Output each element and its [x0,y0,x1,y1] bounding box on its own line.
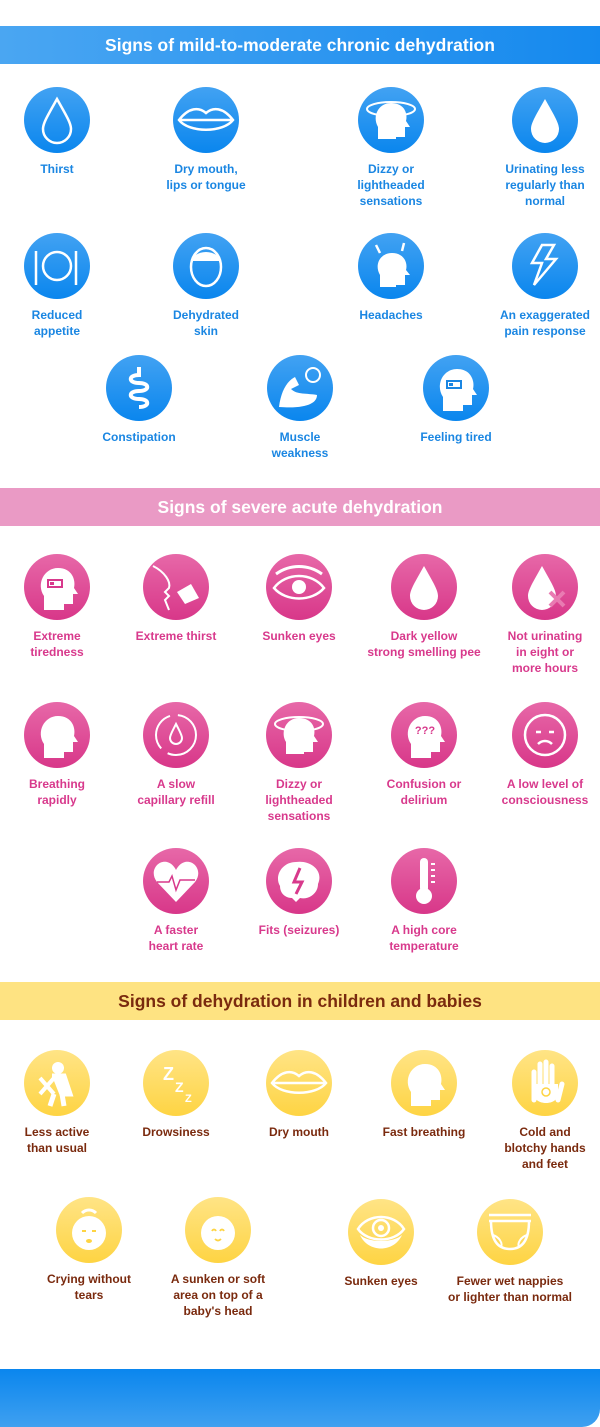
item: Slow capillary refill: A slow [157,777,195,791]
item: Dry mouth [266,1050,332,1139]
item: Confusion: Confusion or [387,777,461,791]
item: Urinating less [505,87,585,208]
item: Extreme thirst [136,554,216,643]
item: Fits: Fits (seizures) [259,923,339,937]
item: Fast breathing [383,1050,465,1139]
item: Faster heart rate: A faster [154,923,198,937]
item: High core temperature: A high core [391,923,457,937]
heading: mild-to-moderate [0,26,600,64]
item: Sunken soft area: area on top of a [173,1288,263,1302]
item: High core temperature: temperature [389,939,459,953]
item: Cold hands: blotchy hands [504,1141,586,1155]
item: Muscle weakness: Muscle [280,430,320,444]
item: Crying without tears: tears [75,1288,103,1302]
item: Sunken soft area [171,1197,265,1318]
item: Sunken eyes [344,1199,418,1288]
item: Feeling tired [420,355,492,444]
item: Reduced appetite [24,233,90,338]
item: Dehydrated skin: skin [194,324,218,338]
item: Crying without tears: Crying without [47,1272,131,1286]
item: Dark yellow pee: strong smelling pee [367,645,481,659]
item: Cold hands [504,1050,586,1171]
item: Confusion: ??? [415,725,435,737]
item: Dry mouth: Dry mouth, [174,162,238,176]
item: Dizzy: sensations [360,194,422,208]
item: Dry mouth: lips or tongue [166,178,246,192]
item: Dehydrated skin [173,233,239,338]
heading: severe acute [0,488,600,526]
item: Fewer wet nappies [448,1199,572,1304]
item: Dizzy severe: sensations [268,809,330,823]
item: Drowsiness: Drowsiness [142,1125,210,1139]
item: Dizzy: lightheaded [357,178,425,192]
item: Less active: than usual [27,1141,87,1155]
item: Constipation: Constipation [102,430,176,444]
item: Low consciousness: consciousness [502,793,588,807]
item: Dry mouth: Dry mouth [269,1125,329,1139]
item: Not urinating: in eight or [516,645,574,659]
item: Cold hands: Cold and [519,1125,571,1139]
item: Drowsiness [142,1050,210,1139]
item: Slow capillary refill: capillary refill [137,793,215,807]
item: Extreme tiredness: Extreme [33,629,81,643]
item: Extreme tiredness [24,554,90,659]
item: Not urinating: Not urinating [508,629,582,643]
item: Low consciousness [502,702,588,807]
item: Less active: Less active [25,1125,89,1139]
item: Faster heart rate: heart rate [149,939,203,953]
item: Low consciousness: A low level of [507,777,583,791]
item: Breathing rapidly: rapidly [37,793,77,807]
item: Fast breathing: Fast breathing [383,1125,465,1139]
heading: children and babies [0,982,600,1020]
item: Sunken eyes [262,554,336,643]
item: Slow capillary refill [137,702,215,807]
item: Breathing rapidly: Breathing [29,777,85,791]
item: Cold hands: and feet [522,1157,568,1171]
item: Not urinating [508,554,582,675]
item: Dark yellow pee [367,554,481,659]
item: Feeling tired: Feeling tired [420,430,492,444]
item: Dry mouth [166,87,246,192]
item: Crying without tears [47,1197,131,1302]
item: Sunken soft area: A sunken or soft [171,1272,265,1286]
item: Pain response: An exaggerated [500,308,590,322]
item: Dizzy severe: lightheaded [265,793,333,807]
item: Constipation [102,355,176,444]
item: Thirst: Thirst [40,162,74,176]
item: Urinating less: Urinating less [505,162,585,176]
item: Dizzy [357,87,425,208]
heading: severe acute: Signs of severe acute dehydration [158,497,442,517]
item: High core temperature [389,848,459,953]
footer band [0,1369,600,1427]
item: Drowsiness: Z [175,1079,184,1095]
item: Fits [259,848,339,937]
item: Muscle weakness: weakness [272,446,328,460]
item: Fewer wet nappies: or lighter than normal [448,1290,572,1304]
item: Dizzy severe: Dizzy or [276,777,322,791]
item: Sunken eyes: Sunken eyes [344,1274,418,1288]
item: Sunken eyes: Sunken eyes [262,629,336,643]
item: Dehydrated skin: Dehydrated [173,308,239,322]
item: Urinating less: normal [525,194,565,208]
item: Urinating less: regularly than [505,178,585,192]
item: Extreme thirst: Extreme thirst [136,629,216,643]
item: Reduced appetite: Reduced [32,308,82,322]
item: Sunken soft area: baby's head [184,1304,252,1318]
item: Dark yellow pee: Dark yellow [391,629,457,643]
item: Muscle weakness [267,355,333,460]
item: Faster heart rate [143,848,209,953]
item: Pain response: pain response [504,324,586,338]
item: Dizzy severe [265,702,333,823]
item: Drowsiness: Z [185,1093,192,1105]
item: Thirst [24,87,90,176]
item: Fewer wet nappies: Fewer wet nappies [457,1274,563,1288]
item: Confusion: delirium [401,793,447,807]
heading: mild-to-moderate: Signs of mild-to-moderate chronic dehydration [105,35,495,55]
item: Breathing rapidly [24,702,90,807]
item: Headaches: Headaches [359,308,423,322]
item: Dizzy: Dizzy or [368,162,414,176]
item: Drowsiness: Z [163,1064,174,1084]
item: Reduced appetite: appetite [34,324,80,338]
item: Headaches [358,233,424,322]
item: Confusion [387,702,462,807]
item: Less active [24,1050,90,1155]
heading: children and babies: Signs of dehydration in children and babies [118,991,482,1011]
item: Not urinating: more hours [512,661,578,675]
item: Pain response [500,233,590,338]
item: Extreme tiredness: tiredness [30,645,84,659]
